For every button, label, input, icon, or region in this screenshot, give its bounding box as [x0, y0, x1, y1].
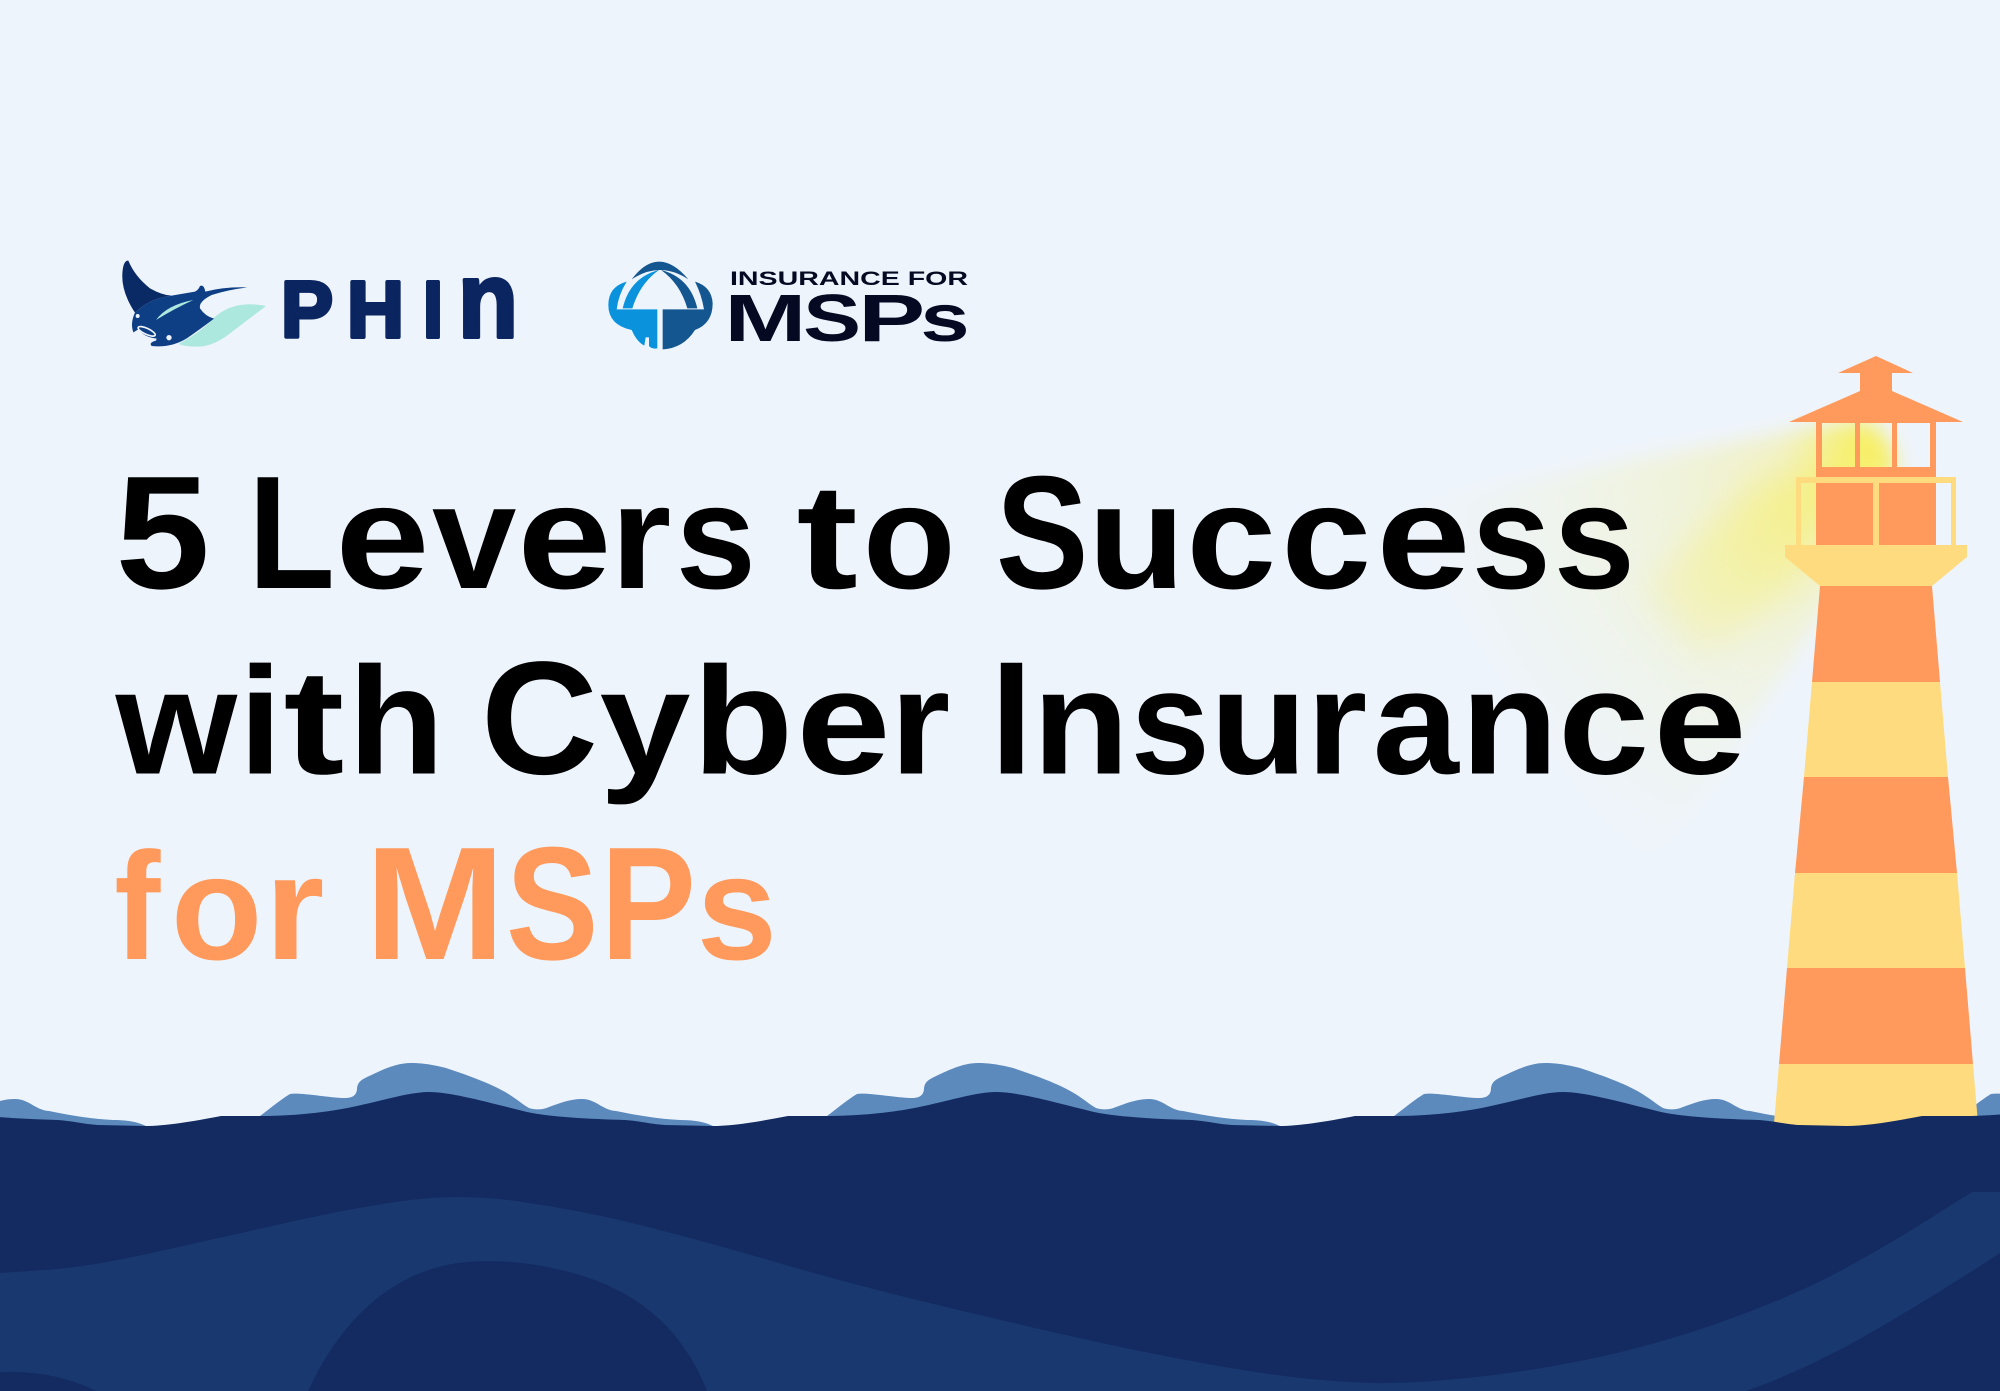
title line 2: a: [1373, 638, 1460, 806]
title line 1: c: [1281, 453, 1371, 620]
title line 2: b: [693, 636, 793, 806]
wordmark: MSPs: P: [858, 281, 925, 356]
title line 1: L: [248, 443, 335, 623]
wordmark: INSURANCE FOR: INSURANCE FOR: [730, 269, 968, 290]
title line 1: e: [517, 453, 612, 620]
back waves: [0, 1063, 2000, 1140]
wordmark: PHIN: n: [458, 239, 518, 360]
title line 1: S: [996, 443, 1088, 623]
title line 1: e: [335, 453, 430, 620]
title line 2: I: [991, 628, 1032, 808]
icon: umbrella cloud: [608, 262, 713, 349]
title: [114, 443, 1746, 994]
title line 2: e: [796, 638, 890, 806]
title line 1: s: [676, 453, 756, 620]
title line 2: c: [1558, 638, 1649, 806]
lighthouse tower stripes: [1773, 586, 1979, 1135]
title line 3: r: [265, 824, 324, 991]
lighthouse roof: [1789, 356, 1963, 422]
title line 2: t: [284, 638, 344, 806]
title line 2: r: [890, 638, 950, 806]
icon: manta ray: [122, 261, 266, 347]
wordmark: PHIN: P: [281, 265, 333, 354]
title line 1: s: [1472, 453, 1551, 620]
ocean lighter band: [0, 1192, 2000, 1391]
logo: Insurance for MSPs: [608, 262, 970, 356]
title line 2: e: [1654, 638, 1746, 806]
title line 2: w: [115, 638, 238, 806]
title line 2: r: [1306, 638, 1367, 806]
title line 2: u: [1210, 638, 1307, 806]
title line 3: o: [171, 824, 262, 991]
title line 2: i: [239, 636, 282, 806]
wordmark: MSPs: M: [724, 281, 806, 356]
light beam from lighthouse: [1390, 418, 1897, 890]
title line 1: s: [1554, 453, 1635, 620]
wordmark: PHIN: H: [347, 265, 404, 354]
lighthouse gallery: [1785, 545, 1967, 586]
title line 1: r: [610, 453, 671, 620]
ocean small dark swell: [0, 1372, 96, 1391]
title line 2: n: [1461, 638, 1558, 806]
wordmark: MSPs: s: [920, 281, 970, 356]
title line 3: M: [365, 814, 505, 994]
lighthouse lantern room with windows: [1816, 420, 1936, 546]
title line 1: c: [1186, 453, 1276, 620]
title line 2: C: [481, 628, 598, 808]
title line 2: y: [600, 638, 691, 806]
title line 1: u: [1088, 453, 1185, 620]
lighthouse: [1773, 356, 1979, 1135]
wordmark: PHIN: I: [423, 265, 443, 354]
title line 2: s: [1131, 638, 1210, 806]
front wave: [0, 1092, 2000, 1391]
lighthouse railing: [1796, 477, 1956, 546]
title line 3: f: [114, 821, 161, 992]
title line 1: 5: [115, 443, 210, 623]
title line 1: v: [432, 453, 517, 620]
ocean: [0, 1092, 2000, 1391]
title line 1: t: [796, 453, 858, 620]
title line 3: P: [600, 814, 696, 994]
title line 1: e: [1376, 453, 1470, 620]
title line 3: S: [506, 814, 598, 994]
wordmark: MSPs: S: [803, 281, 861, 356]
logo: PHIN: [122, 239, 518, 360]
wordmark: PHIN: [281, 239, 518, 360]
title line 2: h: [348, 636, 444, 806]
title line 3: s: [697, 824, 777, 991]
title line 2: n: [1032, 638, 1129, 806]
ocean dark swell: [308, 1261, 707, 1391]
title line 1: o: [863, 453, 956, 620]
